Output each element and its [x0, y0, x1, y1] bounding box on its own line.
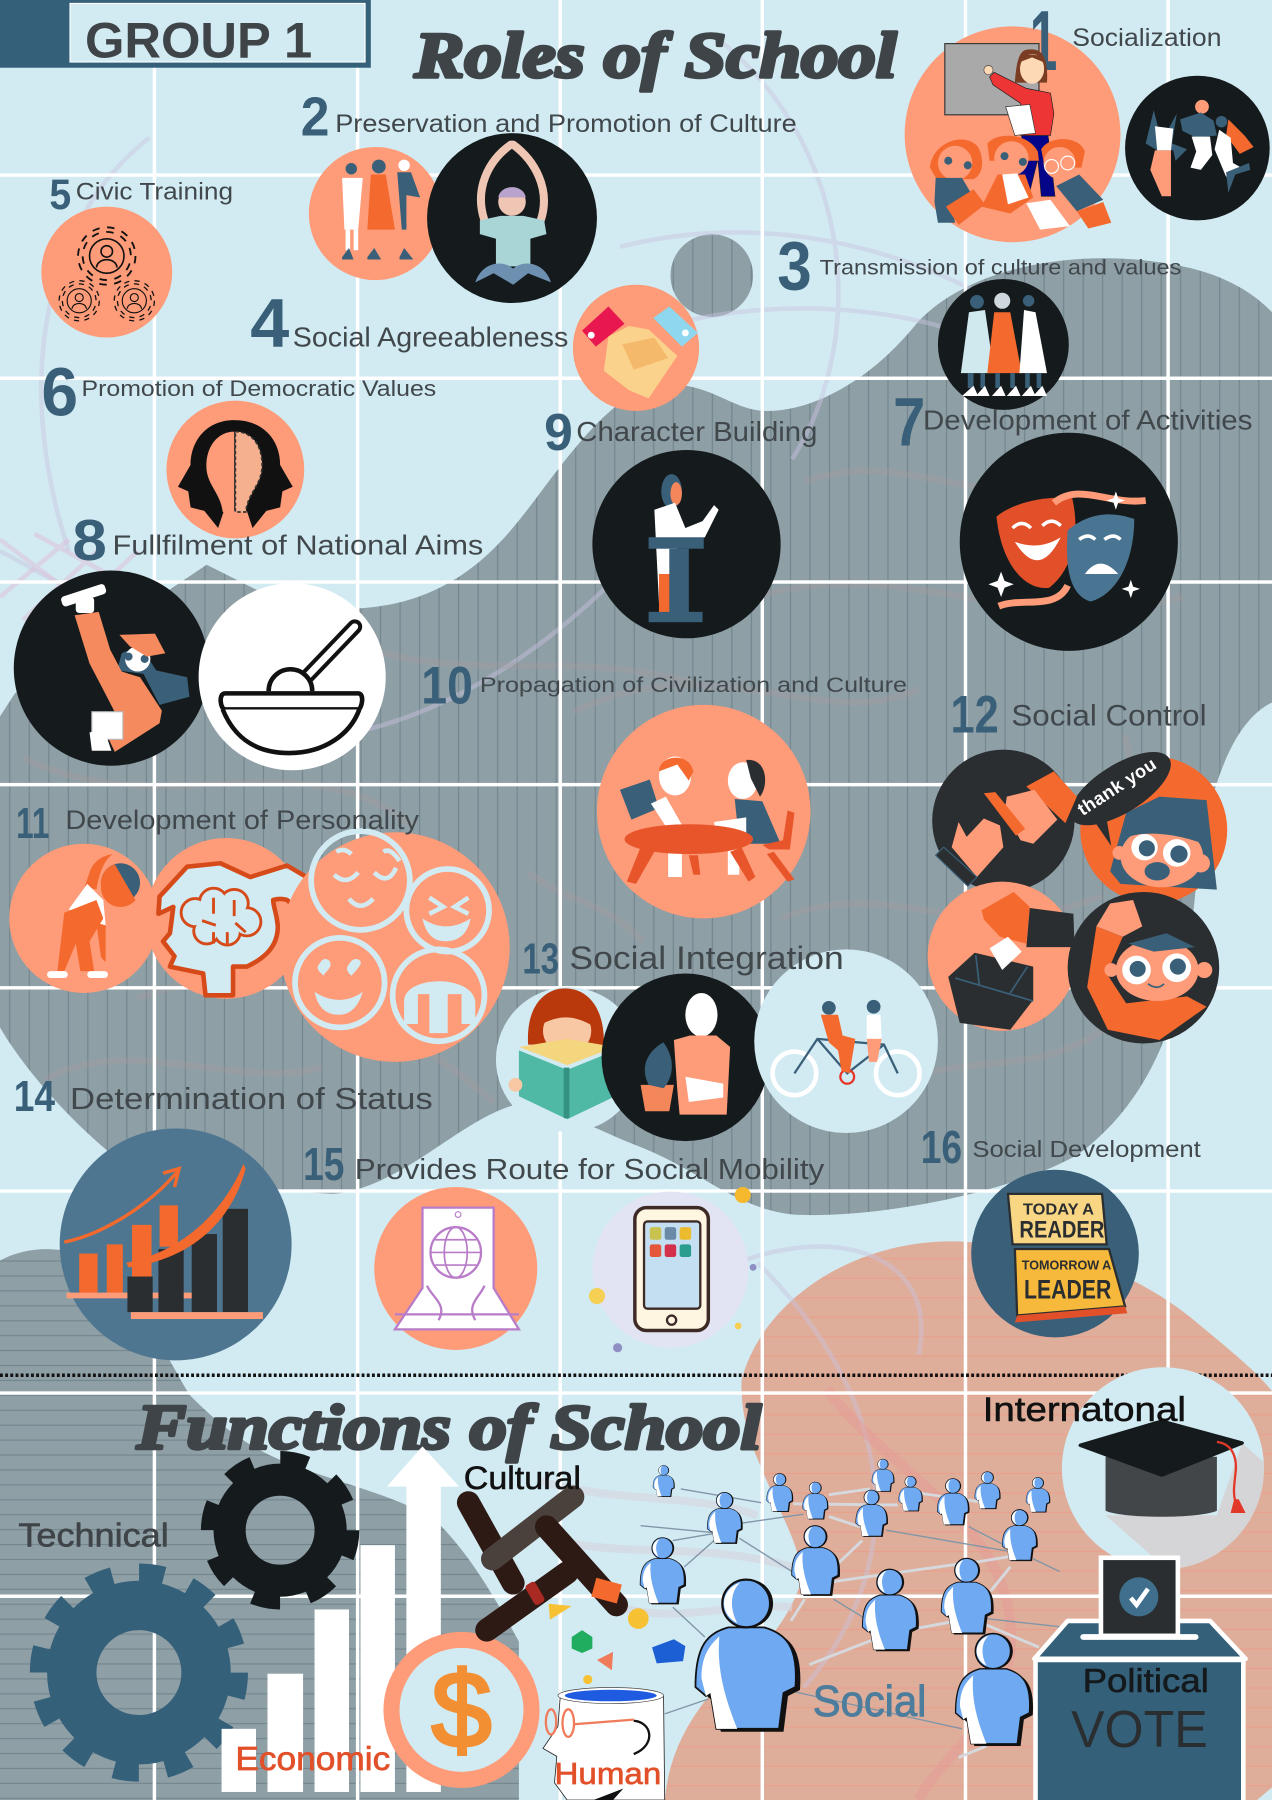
- peach circle with brain head: [146, 838, 311, 999]
- label: Cultural: [464, 1460, 581, 1496]
- label: Social Integration: [569, 940, 844, 976]
- box: [1034, 1621, 1246, 1800]
- salmon blob: [665, 1241, 1272, 1800]
- black gear: [209, 1459, 351, 1601]
- floating shapes: [549, 1604, 685, 1684]
- cultural function: [464, 1460, 622, 1630]
- number 15: 15: [303, 1138, 344, 1190]
- pink hatch top-left of gray: [0, 534, 149, 626]
- dollar coin: $: [431, 1649, 492, 1770]
- group badge: [0, 0, 371, 68]
- faint contour lines: [23, 471, 1184, 1102]
- small gray circle: [670, 234, 753, 317]
- label: Civic Training: [76, 179, 233, 206]
- social function network: [640, 1459, 1060, 1758]
- number 9: 9: [544, 403, 573, 461]
- girl saying thank you: [1059, 738, 1227, 903]
- role 1: socialization: [905, 0, 1270, 242]
- number 2: 2: [301, 85, 329, 147]
- black circle with plant figure: [602, 973, 769, 1141]
- label: Social Development: [972, 1136, 1202, 1162]
- role 8: national aims: [14, 509, 483, 770]
- blue circle with leader book: [971, 1170, 1139, 1337]
- number 7: 7: [893, 383, 925, 460]
- number 12: 12: [951, 685, 999, 744]
- blue circle with leader book: READER: [1019, 1217, 1104, 1243]
- number 11: 11: [16, 800, 49, 848]
- dollar coin: [383, 1632, 540, 1788]
- kid with book: [930, 140, 985, 225]
- faint swirl lines: [0, 34, 1033, 1688]
- number 5: 5: [49, 171, 71, 218]
- black circle with podium speaker: [592, 450, 781, 638]
- group badge: GROUP 1: [85, 11, 312, 68]
- role 6: democratic values: [41, 354, 436, 538]
- technical function: [18, 1459, 351, 1772]
- network lines: [641, 1489, 1060, 1729]
- role 7: development of activities: [893, 383, 1252, 651]
- role 9: character building: [544, 403, 817, 638]
- dotted divider: [0, 1374, 1272, 1377]
- label: Economic: [235, 1741, 390, 1778]
- label: political: Political: [1083, 1663, 1209, 1700]
- economic function: [222, 1446, 540, 1792]
- label: Promotion of Democratic Values: [82, 376, 436, 401]
- lower-left gray blob: [0, 1249, 519, 1800]
- bicycle circle: [754, 949, 938, 1133]
- international circle: [983, 1367, 1272, 1573]
- teacher: [984, 49, 1055, 196]
- thick pale network lines: [791, 1489, 1039, 1758]
- number 10: 10: [421, 657, 473, 716]
- title: functions of school: Functions of School: [135, 1393, 762, 1463]
- kid in middle: [982, 136, 1039, 214]
- role 14: determination of status: [14, 1073, 433, 1360]
- role 2: preservation of culture: [301, 85, 797, 303]
- blue circle with leader book: TODAY A: [1023, 1201, 1094, 1219]
- number 4: 4: [250, 285, 289, 362]
- number 14: 14: [14, 1073, 56, 1121]
- kid with puzzle: [1026, 139, 1111, 230]
- number 13: 13: [522, 935, 559, 983]
- blue circle with bar chart: [60, 1128, 292, 1360]
- number 8: 8: [72, 509, 107, 573]
- role 4: social agreeableness: [250, 285, 699, 411]
- label: Social Agreeableness: [293, 322, 568, 353]
- label: Internatonal: [983, 1391, 1186, 1429]
- lavender circle with phone: [589, 1187, 757, 1352]
- label: Fullfilment of National Aims: [113, 529, 483, 560]
- head with cup: [543, 1688, 665, 1800]
- white bars and arrow: [222, 1446, 459, 1792]
- hand with ballot box: [928, 882, 1077, 1031]
- black circle with three women: [938, 279, 1069, 410]
- role 10: propagation: [421, 657, 907, 918]
- label: Technical: [18, 1517, 169, 1554]
- role 11: development of personality: [9, 800, 510, 1062]
- label: vote: VOTE: [1071, 1700, 1208, 1758]
- black circle with dancers: [1125, 76, 1270, 220]
- peach circle and board: [905, 26, 1120, 242]
- peach circle with emoji faces: [280, 831, 510, 1062]
- white circle with bowl: [199, 583, 386, 770]
- people: [640, 1459, 1050, 1746]
- label: Human: [554, 1756, 661, 1791]
- role 13: social integration: [496, 935, 938, 1141]
- political function ballot box: [1034, 1558, 1246, 1800]
- graduation cap: [1080, 1421, 1246, 1517]
- label: Provides Route for Social Mobility: [355, 1154, 825, 1186]
- label: Character Building: [576, 416, 817, 447]
- number 16: 16: [921, 1121, 962, 1173]
- peach circle with two heads: [166, 401, 304, 538]
- boy waving: [1068, 892, 1219, 1043]
- label: Preservation and Promotion of Culture: [335, 110, 797, 138]
- label: Determination of Status: [70, 1081, 433, 1116]
- label: Transmission of culture and values: [820, 256, 1181, 279]
- black circle with yoga pose: [427, 133, 597, 303]
- circle: [1062, 1367, 1264, 1569]
- title: roles of school: Roles of School: [413, 20, 897, 91]
- black circle with graduate: [14, 571, 209, 766]
- label: Development of Personality: [65, 805, 420, 835]
- role 5: civic training: [41, 171, 233, 338]
- peach circle with handshake: [573, 285, 699, 411]
- blue circle with leader book: LEADER: [1024, 1274, 1111, 1304]
- peach circle with tablet and globe: [374, 1187, 537, 1350]
- linked hands: [468, 1497, 622, 1630]
- shaded corner: [1106, 1443, 1272, 1573]
- human function: [543, 1604, 685, 1800]
- role 12: social control: [928, 685, 1227, 1043]
- role 16: social development: [921, 1121, 1202, 1337]
- label: Social: [813, 1678, 926, 1726]
- pale bands behind network: [540, 1481, 792, 1614]
- label: Socialization: [1072, 24, 1221, 52]
- label: Development of Activities: [923, 404, 1252, 435]
- number 3: 3: [777, 227, 812, 304]
- girl saying thank you: thank you: [1073, 753, 1160, 820]
- peach circle with children at table: [597, 705, 810, 918]
- peach circle with stretching figure: [9, 844, 158, 993]
- reader circle: [496, 987, 641, 1132]
- role 3: transmission of culture and values: [777, 227, 1181, 410]
- ballot: [1080, 1558, 1199, 1640]
- blue circle with leader book: TOMORROW A: [1022, 1259, 1111, 1273]
- number 6: 6: [41, 354, 78, 431]
- pink lines on salmon: [827, 1389, 1011, 1800]
- label: Social Control: [1011, 700, 1207, 733]
- role 15: route for social mobility: [303, 1138, 825, 1352]
- blue gear: [39, 1573, 239, 1772]
- peach circle with three women: [309, 147, 442, 280]
- label: Propagation of Civilization and Culture: [480, 674, 907, 697]
- black circle with theatre masks: [960, 433, 1178, 651]
- hands with pencil: [932, 750, 1077, 892]
- peach circle with gears: [41, 207, 172, 338]
- gray blob with vertical lines: [0, 258, 1272, 1215]
